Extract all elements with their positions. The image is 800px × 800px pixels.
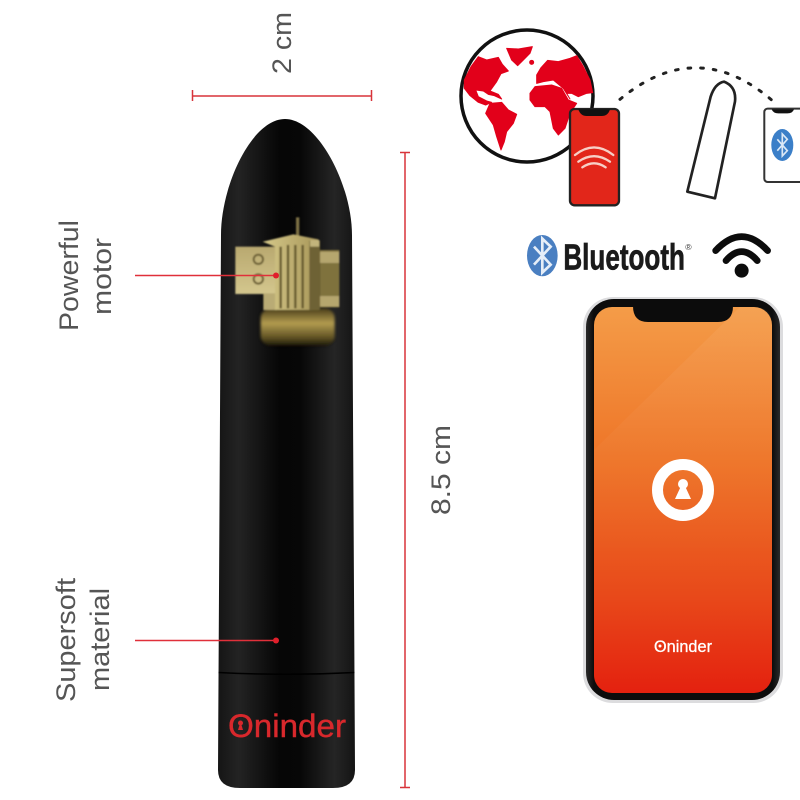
callout: supersoft material: material — [85, 588, 115, 691]
dotted connection arc — [620, 68, 772, 100]
app logo — [658, 464, 708, 516]
brand logo on product: Oninder — [228, 708, 346, 744]
width dimension — [192, 90, 372, 101]
height label: 8.5 cm — [426, 425, 456, 515]
app brand name: Oninder — [654, 637, 712, 656]
bluetooth logo: ® — [685, 242, 692, 252]
icon: wifi — [716, 237, 768, 278]
icon: white phone with bluetooth — [764, 109, 800, 182]
height dimension — [400, 152, 410, 788]
app screen — [594, 307, 772, 693]
notch — [633, 306, 733, 322]
callout: supersoft material — [51, 577, 279, 702]
motor cutaway — [235, 217, 339, 346]
width label: 2 cm — [267, 12, 297, 74]
product body — [218, 119, 355, 788]
icon: globe — [461, 30, 593, 162]
callout: powerful motor: motor — [87, 238, 117, 315]
smartphone mockup — [583, 297, 783, 703]
bluetooth logo: Bluetooth — [563, 236, 685, 277]
callout: supersoft material: Supersoft — [51, 577, 81, 702]
connectivity diagram — [527, 68, 800, 278]
bluetooth logo — [527, 235, 692, 277]
callout: powerful motor — [54, 220, 279, 331]
icon: product outline — [687, 82, 735, 198]
callout: powerful motor: Powerful — [54, 220, 84, 331]
icon: red phone with wifi — [570, 109, 619, 205]
